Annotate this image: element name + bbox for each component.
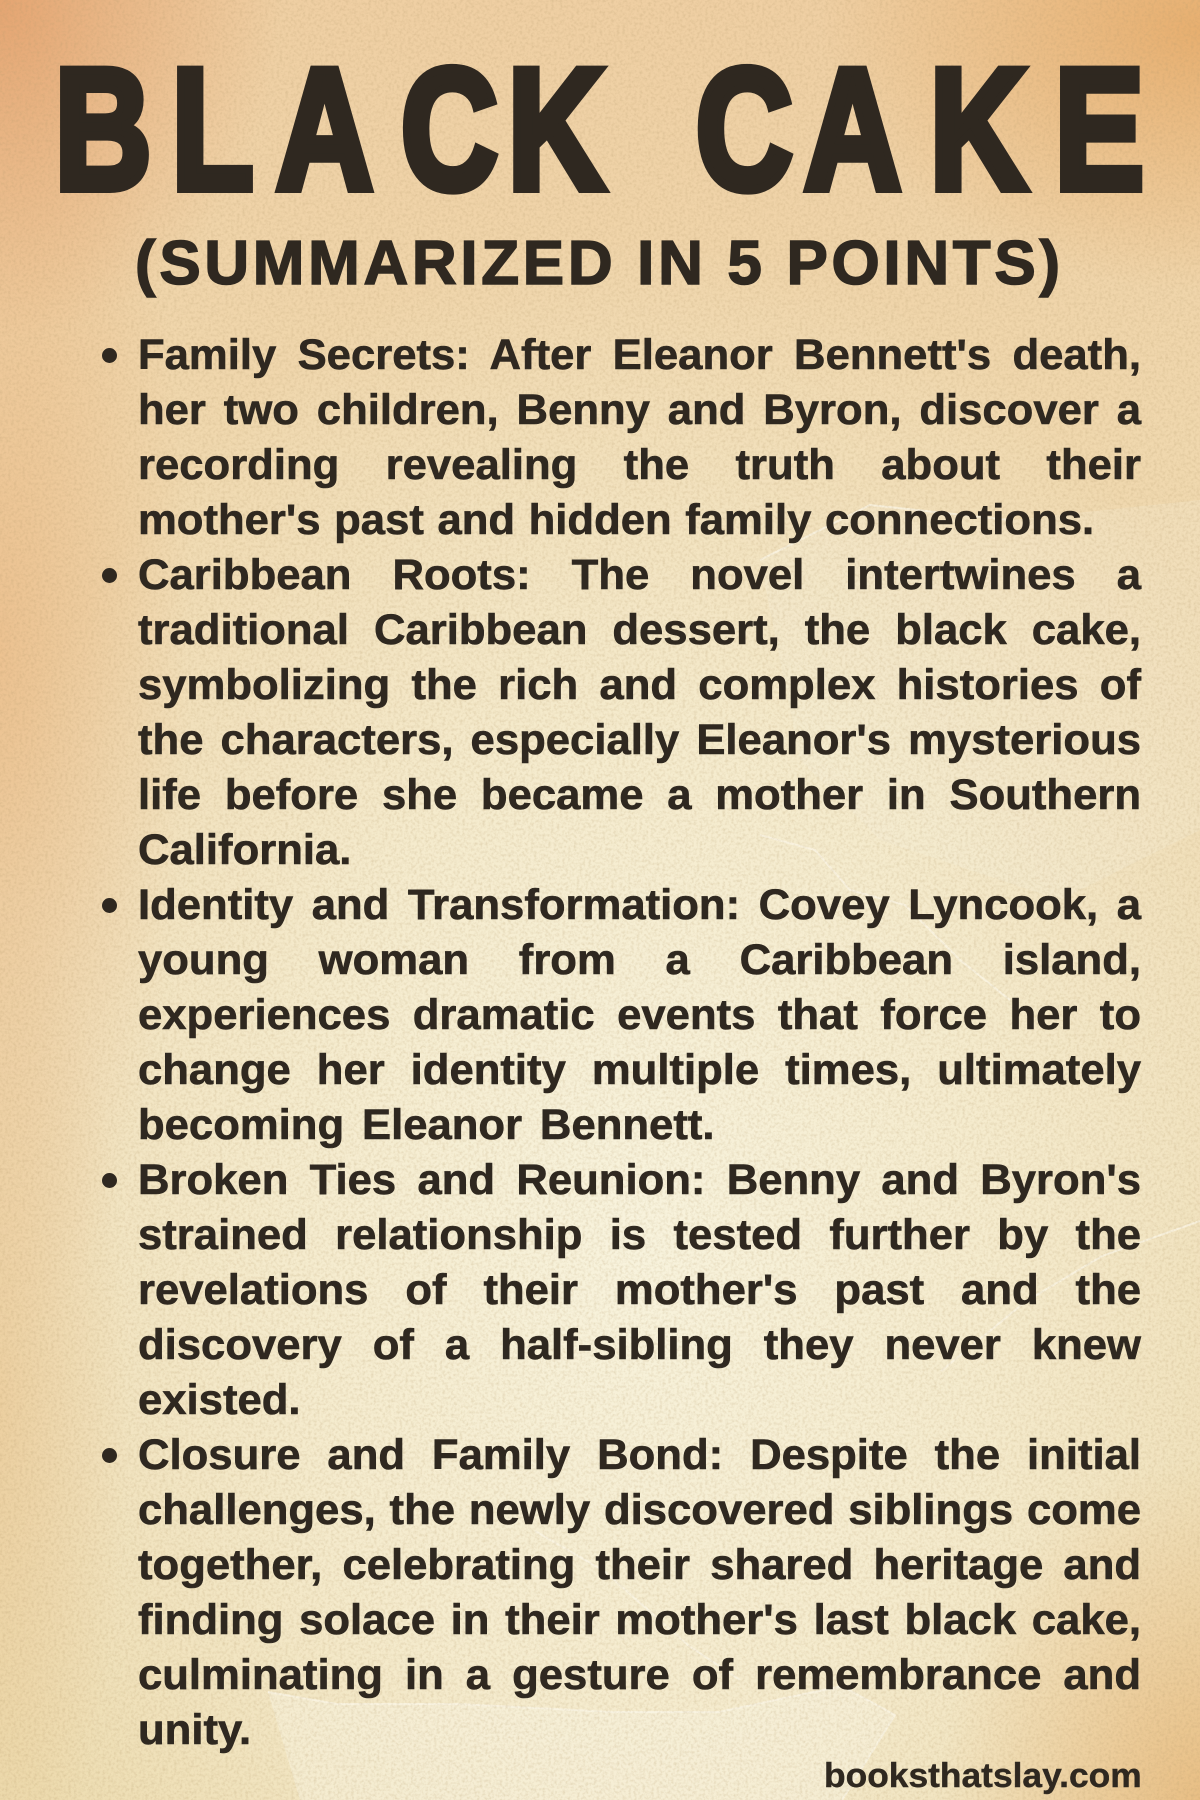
point 2: Caribbean Roots: life before she became a mother in Southern xyxy=(138,771,1141,819)
point 2: Caribbean Roots: California. xyxy=(138,826,351,874)
point 4: Broken Ties and Reunion: discovery of a half-sibling they never knew xyxy=(138,1321,1141,1369)
bullet list: five summary points xyxy=(102,331,1142,1754)
point 1: Family Secrets: Family Secrets: After Eleanor Bennett's death, xyxy=(138,331,1141,379)
point 2: Caribbean Roots: the characters, especially Eleanor's mysterious xyxy=(138,716,1141,764)
point 2: Caribbean Roots: symbolizing the rich and complex histories of xyxy=(138,661,1141,709)
point 5: Closure and Family Bond: Closure and Family Bond: Despite the initial xyxy=(138,1431,1141,1479)
point 1: Family Secrets: recording revealing the truth about their xyxy=(138,441,1141,489)
point 3: Identity and Transformation: experiences dramatic events that force her to xyxy=(138,991,1141,1039)
point 5: Closure and Family Bond: culminating in a gesture of remembrance and xyxy=(138,1651,1141,1699)
title: Black Cake: BLACK CAKE xyxy=(55,32,1144,225)
point 5: Closure and Family Bond: together, celebrating their shared heritage and xyxy=(138,1541,1141,1589)
point 5: Closure and Family Bond: finding solace in their mother's last black cake, xyxy=(138,1596,1141,1644)
point 5: Closure and Family Bond: unity. xyxy=(138,1706,251,1754)
point 3: Identity and Transformation xyxy=(102,881,1142,1149)
point 4: Broken Ties and Reunion: strained relationship is tested further by the xyxy=(138,1211,1141,1259)
point 4: Broken Ties and Reunion: Broken Ties and Reunion: Benny and Byron's xyxy=(138,1156,1141,1204)
point 3: Identity and Transformation: young woman from a Caribbean island, xyxy=(138,936,1141,984)
title block xyxy=(55,32,1144,298)
point 2: Caribbean Roots: Caribbean Roots: The novel intertwines a xyxy=(138,551,1141,599)
point 5: Closure and Family Bond xyxy=(102,1431,1141,1754)
point 3: Identity and Transformation: Identity and Transformation: Covey Lyncook, a xyxy=(138,881,1141,929)
point 1: Family Secrets xyxy=(102,331,1142,544)
point 4: Broken Ties and Reunion: revelations of their mother's past and the xyxy=(138,1266,1141,1314)
point 3: Identity and Transformation: change her identity multiple times, ultimately xyxy=(138,1046,1141,1094)
point 1: Family Secrets: mother's past and hidden family connections. xyxy=(138,496,1094,544)
point 3: Identity and Transformation: becoming Eleanor Bennett. xyxy=(138,1101,715,1149)
subtitle: (SUMMARIZED IN 5 POINTS) xyxy=(135,229,1060,298)
point 2: Caribbean Roots xyxy=(102,551,1142,874)
point 1: Family Secrets: her two children, Benny and Byron, discover a xyxy=(138,386,1141,434)
footer: website credit: booksthatslay.com xyxy=(824,1757,1142,1795)
point 4: Broken Ties and Reunion xyxy=(102,1156,1142,1424)
point 4: Broken Ties and Reunion: existed. xyxy=(138,1376,301,1424)
point 5: Closure and Family Bond: challenges, the newly discovered siblings come xyxy=(138,1486,1141,1534)
point 2: Caribbean Roots: traditional Caribbean dessert, the black cake, xyxy=(138,606,1141,654)
